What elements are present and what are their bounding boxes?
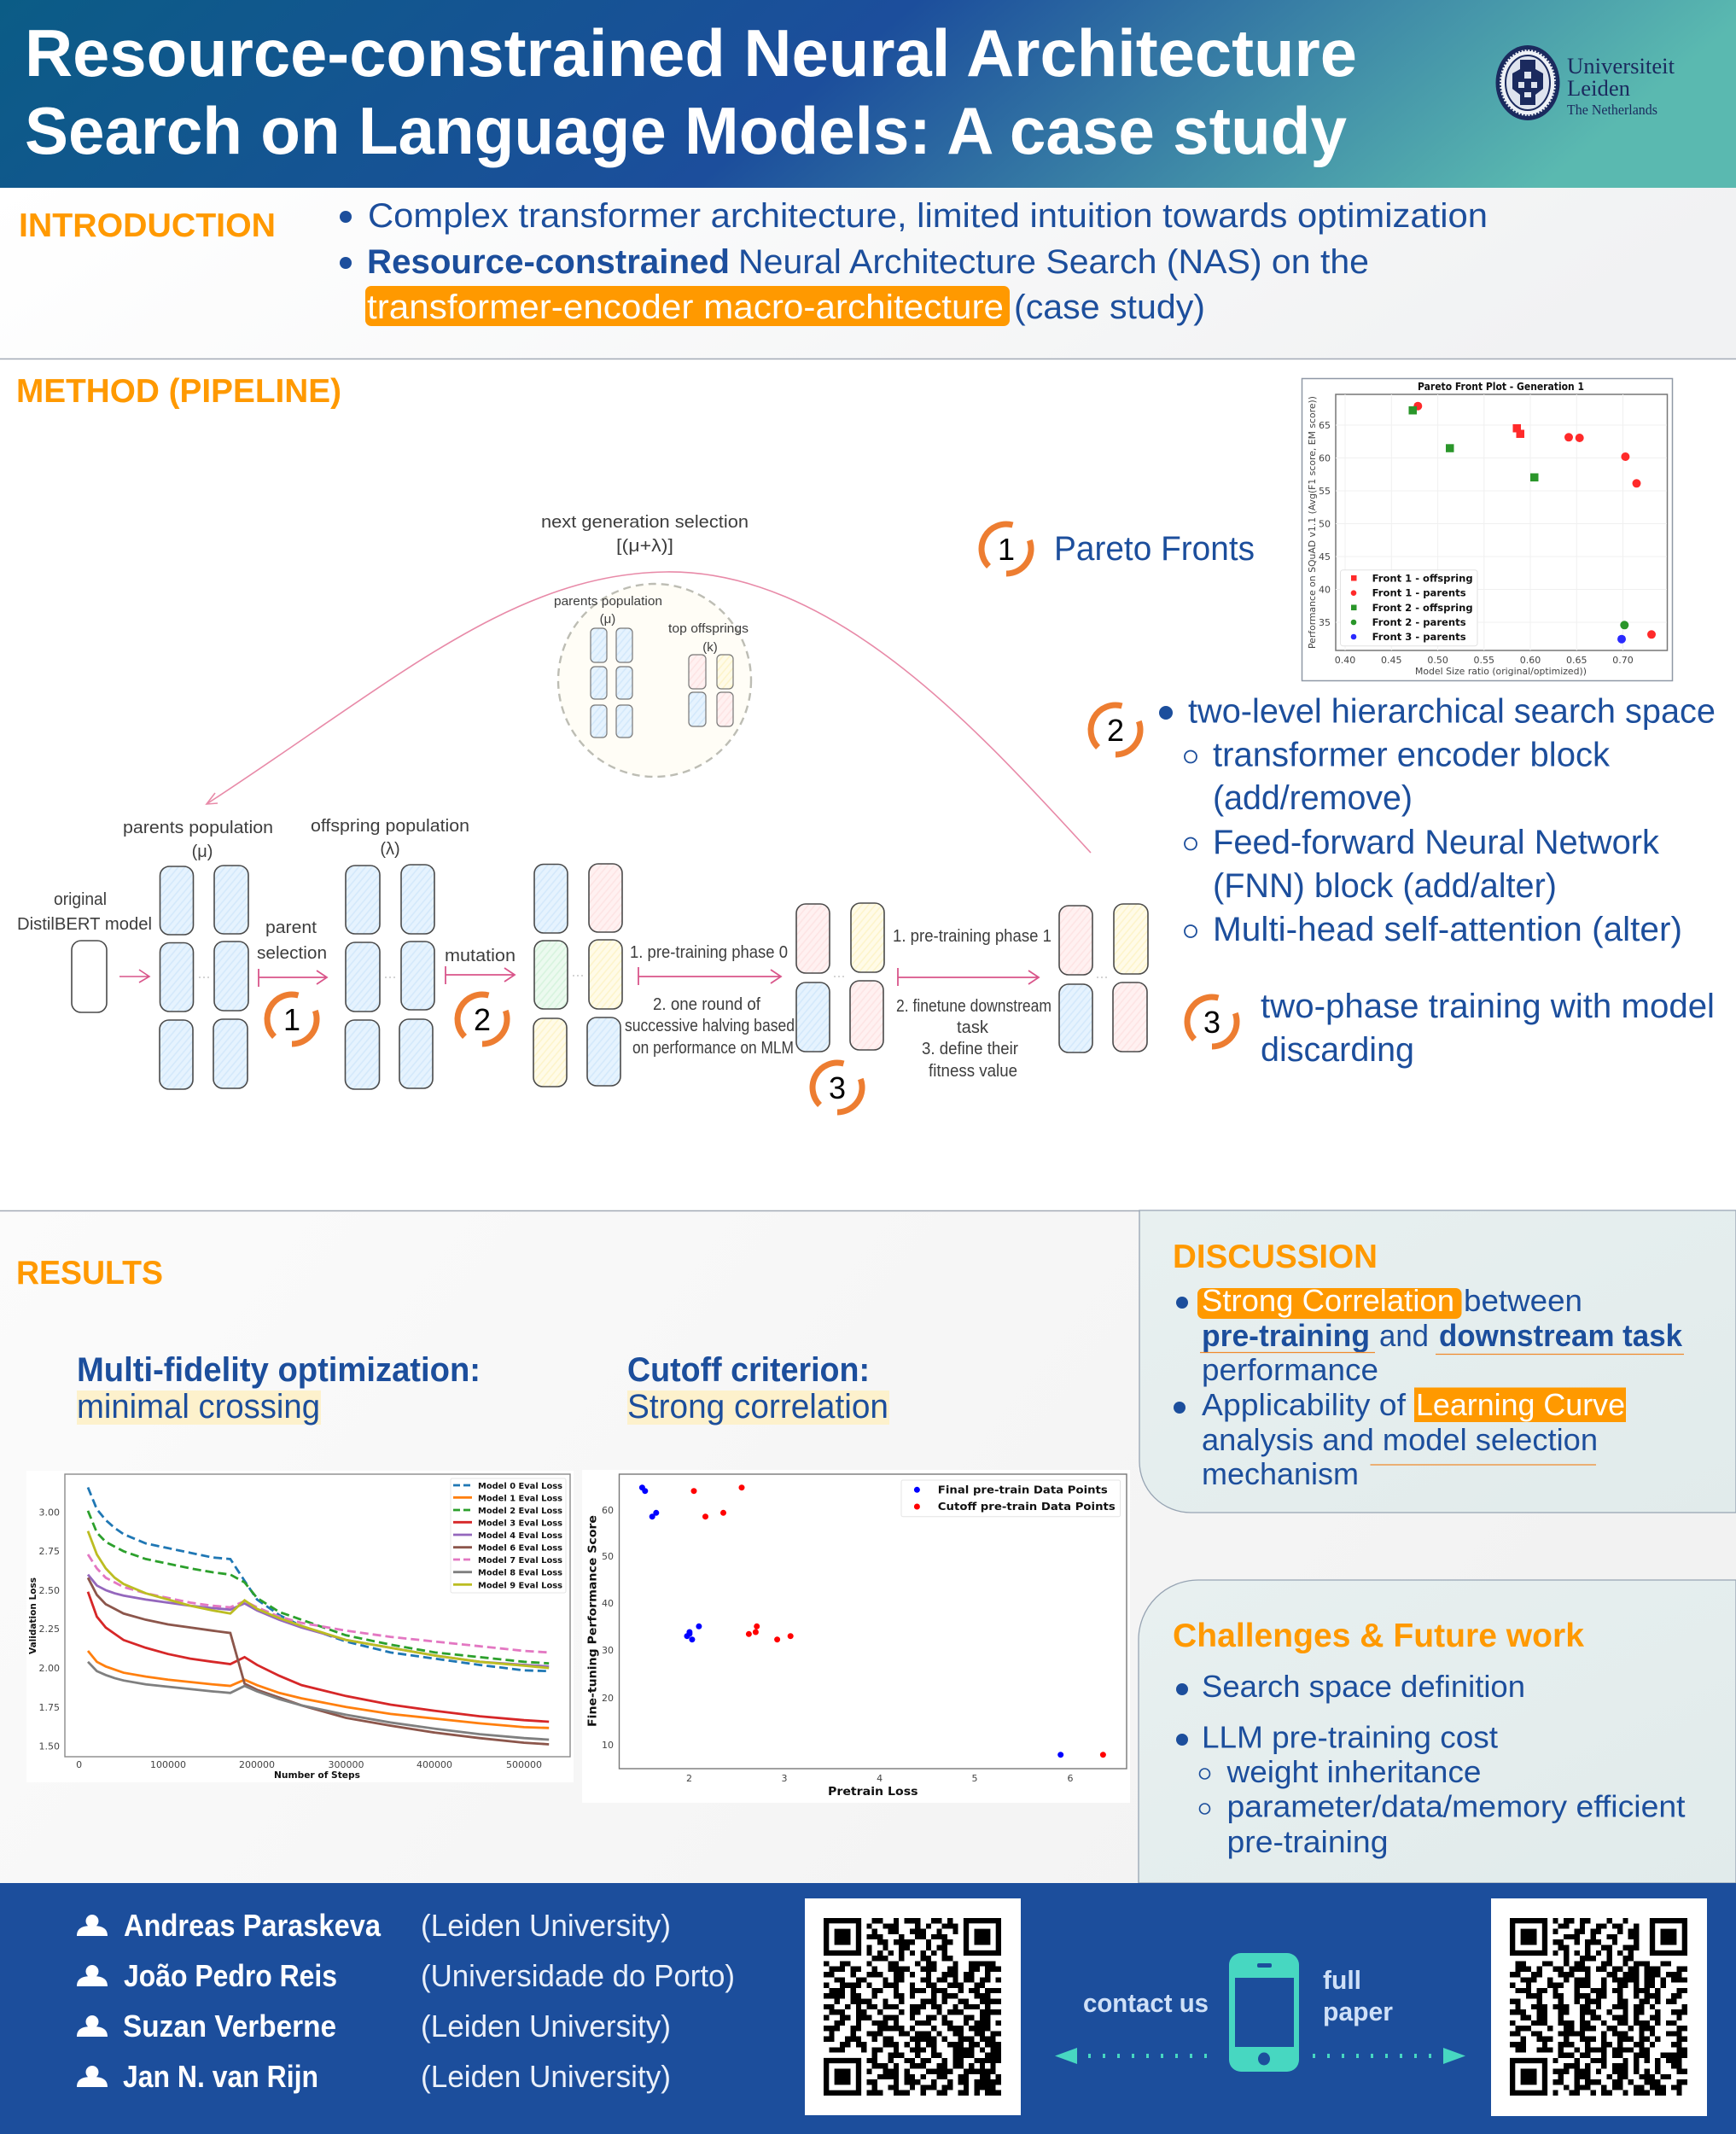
arrow: next generation loop [207, 572, 1091, 853]
chart: pareto front scatter: 0.40 [1335, 655, 1355, 666]
chart: validation loss curves: Model 4 Eval Loss [478, 1531, 562, 1541]
subheading: cutoff criterion: Strong correlation [627, 1388, 888, 1426]
chart: cutoff correlation scatter: 30 [602, 1645, 614, 1656]
arrow: pre-training phase 1: 3. define their [922, 1040, 1018, 1058]
panel: results [0, 1210, 1736, 1883]
chart: cutoff correlation scatter: 5 [971, 1773, 978, 1784]
subheading: multi-fidelity optimization [77, 1351, 481, 1426]
chart: pareto front scatter: 35 [1319, 617, 1331, 628]
chart: pareto front scatter: 0.45 [1381, 655, 1402, 666]
arrow: pre-training phase 0: successive halving based [625, 1017, 795, 1035]
chart: cutoff correlation scatter: 2 [686, 1773, 692, 1784]
text block: two-phase training: two-phase training with model [1261, 988, 1715, 1025]
block: original DistilBERT model: DistilBERT model [17, 915, 152, 934]
legend item: pareto fronts [982, 524, 1255, 574]
chart: cutoff correlation scatter: Pretrain Loss [828, 1786, 918, 1799]
chart: validation loss curves: Number of Steps [274, 1770, 360, 1781]
arrow: pre-training phase 0: 2. one round of [653, 995, 760, 1014]
chart: cutoff correlation scatter [582, 1470, 1130, 1803]
chart: pareto front scatter [1302, 379, 1673, 681]
author: Suzan Verberne: Suzan Verberne [123, 2009, 336, 2044]
logo wordmark: Leiden [1567, 76, 1630, 101]
chart: validation loss curves: Model 6 Eval Loss [478, 1544, 562, 1554]
arrow: pre-training phase 0 [625, 943, 795, 1058]
arrow: pre-training phase 0: on performance on MLM [632, 1039, 794, 1058]
chart: pareto front scatter: 65 [1319, 420, 1331, 431]
arrow: parent selection: selection [257, 944, 327, 963]
text block: search space [1091, 693, 1716, 948]
text block: search space: (add/remove) [1213, 779, 1413, 817]
panel: introduction [0, 188, 1736, 359]
population: offspring: (λ) [380, 840, 400, 859]
title: Resource-constrained Neural Architecture [25, 15, 1357, 90]
chart: pareto front scatter: Pareto Front Plot - Generation 1 [1418, 380, 1584, 393]
chart: validation loss curves: 500000 [506, 1759, 542, 1770]
arrow: pre-training phase 1: fitness value [929, 1062, 1017, 1081]
chart: pareto front scatter: Front 1 - offspring [1372, 572, 1473, 584]
subheading: cutoff criterion: Cutoff criterion: [627, 1351, 870, 1389]
text block: introduction bullets: (case study) [1014, 289, 1205, 326]
chart: cutoff correlation scatter: 20 [602, 1693, 614, 1704]
marker: step 1 in diagram: 1 [283, 1002, 300, 1037]
text block: challenges bullets: weight inheritance [1226, 1754, 1482, 1789]
chart: cutoff correlation scatter: Fine-tuning Performance Score [587, 1515, 599, 1727]
text block: search space: (FNN) block (add/alter) [1213, 867, 1557, 905]
panel: discussion [1139, 1210, 1736, 1513]
chart: pareto front scatter: 55 [1319, 486, 1331, 497]
text block: search space: Feed-forward Neural Network [1213, 824, 1660, 861]
block: original DistilBERT model [17, 890, 152, 1012]
subheading: multi-fidelity optimization: Multi-fidelity optimization: [77, 1351, 481, 1389]
population: final models [1059, 904, 1148, 1052]
text block: search space: 2 [1107, 713, 1124, 748]
label: next generation selection [541, 513, 749, 556]
population: offspring: offspring population [311, 817, 469, 836]
text block: search space: transformer encoder block [1213, 736, 1611, 773]
author: João Pedro Reis: João Pedro Reis [124, 1958, 337, 1993]
chart: cutoff correlation scatter: Final pre-train Data Points [938, 1484, 1108, 1496]
arrow: pre-training phase 1 [893, 927, 1052, 1081]
author: Jan N. van Rijn [77, 2059, 671, 2094]
text block: search space: two-level hierarchical search space [1188, 693, 1716, 731]
text block: two-phase training: 3 [1203, 1005, 1220, 1040]
population: mutated models [533, 864, 622, 1087]
chart: pareto front scatter: 60 [1319, 452, 1331, 464]
text block: introduction bullets: Complex transformer architecture, limited intuition towards optimization [368, 197, 1488, 235]
chart: pareto front scatter: 0.55 [1474, 655, 1494, 666]
logo wordmark [1567, 54, 1675, 118]
author: João Pedro Reis: (Universidade do Porto) [421, 1958, 735, 1993]
chart: cutoff correlation scatter: 3 [782, 1773, 787, 1784]
text block: challenges bullets: Search space definition [1202, 1669, 1525, 1704]
chart: validation loss curves: Model 1 Eval Loss [478, 1494, 562, 1503]
chart: evolutionary pipeline diagram [17, 513, 1148, 1089]
heading: challenges: Challenges & Future work [1173, 1618, 1584, 1654]
population: parents: (μ) [192, 843, 213, 861]
chart: validation loss curves: 3.00 [39, 1507, 60, 1519]
text block: introduction bullets: Resource-constrained [367, 243, 730, 281]
chart: validation loss curves: 300000 [328, 1759, 364, 1770]
chart: cutoff correlation scatter: 40 [602, 1598, 614, 1609]
text block: challenges bullets [1176, 1669, 1685, 1859]
chart: pareto front scatter: 0.50 [1427, 655, 1448, 666]
author: Andreas Paraskeva [77, 1908, 671, 1943]
subheading: multi-fidelity optimization: minimal crossing [77, 1388, 320, 1426]
text block: discussion bullets: mechanism [1202, 1456, 1359, 1491]
population: parents [123, 819, 273, 1089]
QR code: contact us [805, 1898, 1021, 2115]
chart: pareto front scatter: Front 2 - parents [1372, 616, 1466, 628]
label: next generation selection: next generation selection [541, 513, 749, 532]
arrow: to paper QR [1313, 2048, 1465, 2064]
text block: discussion bullets: Applicability of [1202, 1387, 1407, 1422]
text block: discussion bullets: Strong Correlation [1202, 1283, 1454, 1318]
chart: cutoff correlation scatter: 10 [602, 1740, 614, 1751]
arrow: parent selection: parent [265, 918, 317, 937]
author: João Pedro Reis [77, 1958, 735, 1993]
arrow: mutation [445, 947, 516, 984]
title [25, 15, 1357, 168]
chart: validation loss curves: Model 0 Eval Loss [478, 1482, 562, 1491]
label: contact us: contact us [1083, 1988, 1209, 2018]
chart: validation loss curves: 200000 [239, 1759, 275, 1770]
arrow: pre-training phase 1: task [957, 1018, 989, 1037]
chart: validation loss curves: 2.50 [39, 1585, 60, 1596]
chart: cutoff correlation scatter: 4 [877, 1773, 883, 1784]
heading: method pipeline: METHOD (PIPELINE) [16, 373, 341, 410]
chart: validation loss curves: Model 3 Eval Loss [478, 1519, 562, 1528]
chart: validation loss curves: 2.25 [39, 1624, 60, 1635]
population: parents: parents population [123, 819, 273, 837]
chart: cutoff correlation scatter: Cutoff pre-train Data Points [938, 1500, 1116, 1513]
arrow: original to parents [119, 970, 149, 982]
text block: discussion bullets: performance [1202, 1352, 1378, 1387]
arrow: pre-training phase 1: 1. pre-training phase 1 [893, 927, 1052, 946]
author: Suzan Verberne: (Leiden University) [421, 2009, 671, 2044]
chart: pareto front scatter: Front 3 - parents [1372, 631, 1466, 643]
block: original DistilBERT model: original [54, 890, 107, 909]
chart: validation loss curves [26, 1471, 574, 1782]
chart: validation loss curves: 2.75 [39, 1546, 60, 1557]
chart: cutoff correlation scatter: 60 [602, 1505, 614, 1516]
author: Jan N. van Rijn: (Leiden University) [421, 2059, 671, 2094]
marker: step 2 in diagram: 2 [474, 1002, 491, 1037]
text block: challenges bullets: pre-training [1227, 1824, 1388, 1859]
marker: step 3 in diagram: 3 [829, 1070, 846, 1105]
chart: pareto front scatter: 45 [1319, 551, 1331, 563]
chart: validation loss curves: Model 2 Eval Loss [478, 1507, 562, 1516]
arrow: mutation: mutation [445, 947, 516, 965]
chart: pareto front scatter: Front 2 - offspring [1372, 602, 1473, 614]
icon: Leiden University seal [1495, 45, 1560, 120]
circle: next generation selection pool: (μ) [600, 612, 615, 627]
text block: discussion bullets [1174, 1283, 1684, 1491]
circle: next generation selection pool: parents population [554, 594, 662, 609]
chart: cutoff correlation scatter: 6 [1067, 1773, 1074, 1784]
heading: results: RESULTS [16, 1255, 163, 1291]
author: Suzan Verberne [77, 2009, 671, 2044]
chart: pareto front scatter: Front 1 - parents [1372, 587, 1466, 599]
text block: two-phase training: discarding [1261, 1031, 1414, 1069]
chart: validation loss curves: 1.50 [39, 1741, 60, 1752]
text block: discussion bullets: pre-training [1202, 1318, 1370, 1353]
panel: footer [0, 1883, 1736, 2134]
logo wordmark: The Netherlands [1567, 102, 1657, 118]
text block: challenges bullets: LLM pre-training cost [1202, 1719, 1498, 1755]
title: Search on Language Models: A case study [25, 93, 1347, 168]
text block: discussion bullets: between [1464, 1283, 1582, 1318]
author: Andreas Paraskeva: (Leiden University) [421, 1908, 671, 1943]
arrow: to contact QR [1055, 2048, 1209, 2064]
legend item: pareto fronts: 1 [998, 532, 1015, 567]
arrow: pre-training phase 0: 1. pre-training phase 0 [630, 943, 788, 962]
text block: discussion bullets: downstream task [1439, 1318, 1683, 1353]
chart: validation loss curves: 2.00 [39, 1663, 60, 1674]
text block: search space: Multi-head self-attention (alter) [1213, 911, 1682, 948]
chart: validation loss curves: 100000 [150, 1759, 186, 1770]
text block: challenges bullets: parameter/data/memory efficient [1227, 1789, 1685, 1823]
text block: introduction bullets [340, 197, 1488, 326]
chart: pareto front scatter: Performance on SQuAD v1.1 (Avg(F1 score, EM score)) [1307, 396, 1318, 649]
subheading: cutoff criterion [627, 1351, 889, 1426]
chart: validation loss curves: Model 9 Eval Loss [478, 1581, 562, 1590]
chart: validation loss curves: Validation Loss [27, 1577, 38, 1654]
chart: pareto front scatter: Model Size ratio (original/optimized)) [1415, 666, 1587, 677]
label: full paper: paper [1323, 1997, 1393, 2026]
author: Andreas Paraskeva: Andreas Paraskeva [124, 1908, 382, 1943]
chart: pareto front scatter: 50 [1319, 519, 1331, 529]
logo wordmark: Universiteit [1567, 54, 1675, 79]
chart: pareto front scatter: 40 [1319, 584, 1331, 596]
population: offspring [311, 817, 469, 1089]
chart: pareto front scatter: 0.60 [1520, 655, 1541, 666]
chart: validation loss curves: Model 7 Eval Loss [478, 1556, 562, 1566]
chart: validation loss curves: Model 8 Eval Loss [478, 1569, 562, 1578]
icon: smartphone [1229, 1953, 1299, 2072]
text block: discussion bullets: and [1379, 1318, 1429, 1353]
chart: validation loss curves: 400000 [417, 1759, 452, 1770]
chart: pareto front scatter: 0.65 [1566, 655, 1587, 666]
label: next generation selection: [(μ+λ)] [616, 537, 673, 556]
chart: validation loss curves: 1.75 [39, 1702, 60, 1713]
arrow: pre-training phase 1: 2. finetune downstream [896, 997, 1052, 1016]
text block: introduction bullets: Neural Architecture Search (NAS) on the [738, 243, 1369, 281]
panel: challenges and future work [1139, 1580, 1736, 1883]
text block: discussion bullets: analysis and model selection [1202, 1422, 1598, 1457]
marker: step 2 in diagram [457, 994, 507, 1044]
legend item: pareto fronts: Pareto Fronts [1054, 530, 1255, 568]
chart: pareto front scatter: 0.70 [1612, 655, 1634, 666]
heading: discussion: DISCUSSION [1173, 1239, 1378, 1275]
population: after phase 0 [796, 903, 884, 1052]
arrow: parent selection [257, 918, 327, 987]
label: full paper [1323, 1965, 1393, 2026]
text block: two-phase training [1187, 988, 1715, 1069]
marker: step 1 in diagram [267, 994, 317, 1044]
text block: discussion bullets: Learning Curve [1416, 1387, 1625, 1422]
chart: validation loss curves: 0 [76, 1759, 82, 1770]
circle: next generation selection pool: top offsprings [668, 621, 749, 636]
QR code: full paper [1491, 1898, 1707, 2116]
panel: header banner [0, 0, 1736, 188]
chart: cutoff correlation scatter: 50 [602, 1551, 614, 1562]
label: full paper: full [1323, 1965, 1361, 1995]
author: Jan N. van Rijn: Jan N. van Rijn [123, 2059, 318, 2094]
marker: step 3 in diagram [813, 1063, 862, 1112]
circle: next generation selection pool: (k) [702, 640, 718, 655]
circle: next generation selection pool [554, 584, 751, 777]
heading: introduction: INTRODUCTION [19, 207, 276, 244]
text block: introduction bullets: transformer-encoder macro-architecture [367, 289, 1004, 326]
